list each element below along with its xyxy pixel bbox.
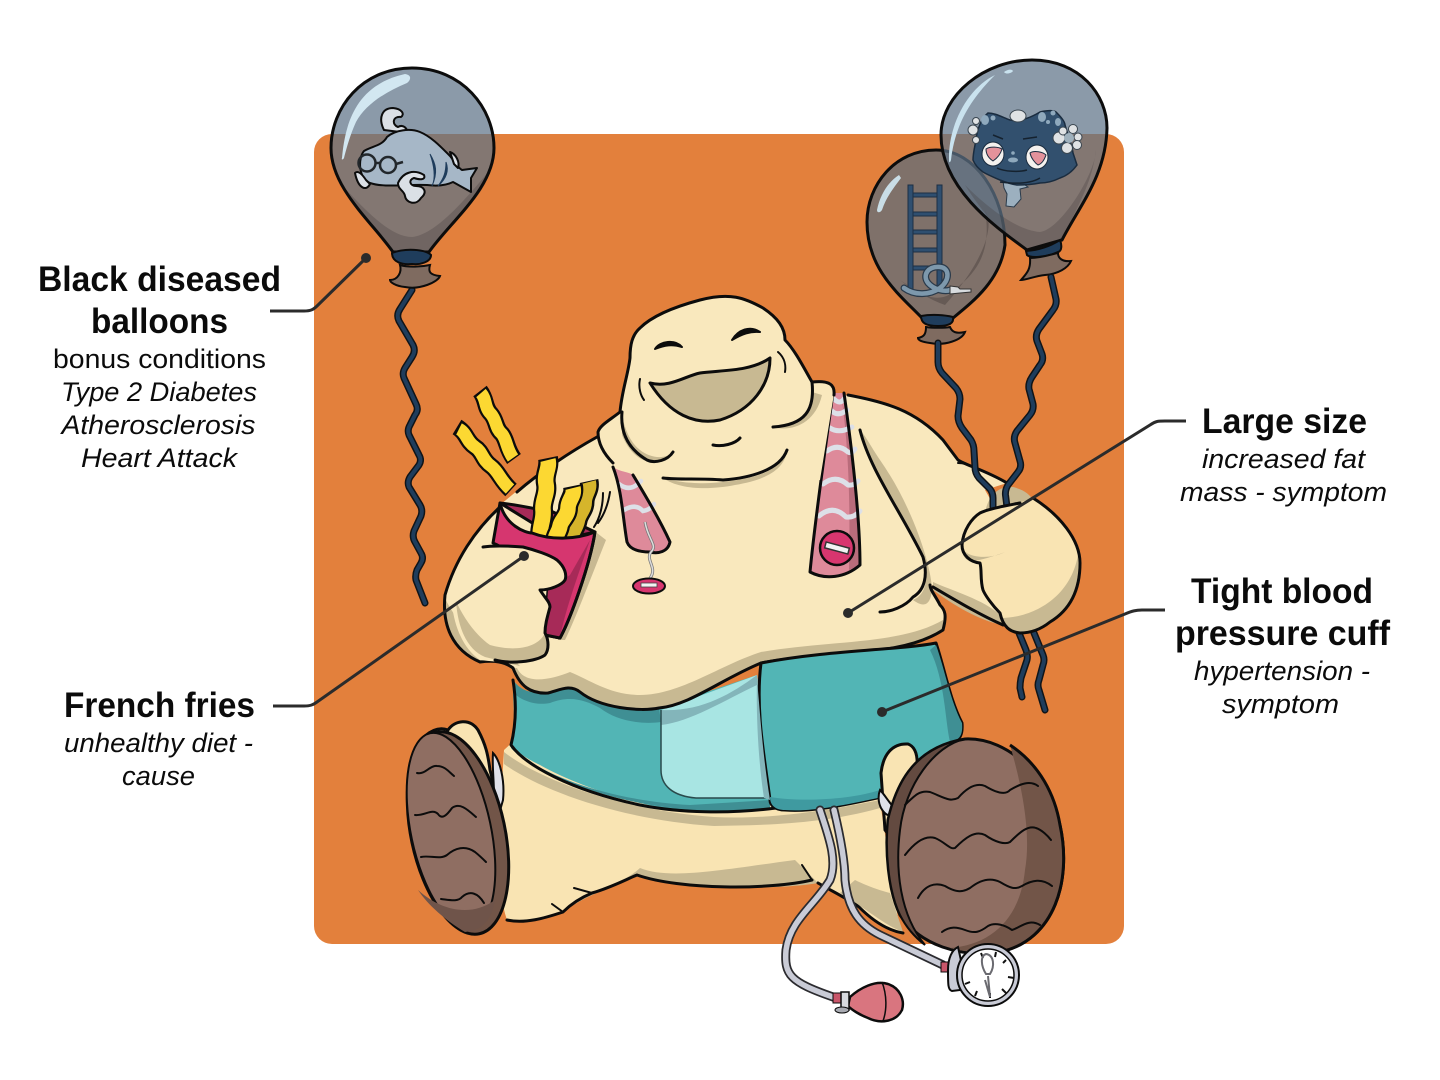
fries in box <box>540 458 589 540</box>
balloon knot <box>392 250 431 264</box>
label: large size: mass - symptom <box>1180 477 1387 507</box>
balloon: ladder and hose <box>867 150 1005 344</box>
label: black diseased balloons: bonus conditions <box>53 344 266 374</box>
label: black diseased balloons <box>38 260 281 473</box>
knot <box>1026 240 1061 257</box>
bulb <box>848 983 903 1021</box>
leader line: large size <box>843 421 1186 618</box>
torso shadows <box>513 430 1033 709</box>
gauge <box>941 944 1019 1006</box>
character: straps with buttons <box>613 393 860 594</box>
character: shorts <box>511 675 776 813</box>
balloon: tired dragon face <box>941 60 1107 280</box>
highlight <box>877 175 901 212</box>
label: tight blood pressure cuff: symptom <box>1222 689 1339 719</box>
shorts light panel <box>661 675 770 798</box>
balloon highlight <box>342 74 410 160</box>
label: black diseased balloons: Atherosclerosis <box>59 410 255 440</box>
label: tight blood pressure cuff: pressure cuff <box>1175 614 1390 653</box>
character: left hand <box>452 545 566 662</box>
toes <box>425 722 495 790</box>
label: large size: increased fat <box>1202 444 1367 474</box>
mouth <box>650 358 770 421</box>
character: head <box>598 296 834 488</box>
dragon spots <box>981 110 1061 162</box>
balloon: sea creature with glasses <box>331 68 494 288</box>
loose fries <box>457 391 514 490</box>
label: large size <box>1180 402 1387 507</box>
character: left shoe <box>391 722 525 944</box>
knot <box>921 315 953 326</box>
label: black diseased balloons: Heart Attack <box>81 443 239 473</box>
label: french fries <box>64 686 255 791</box>
head outline <box>598 296 834 463</box>
label: black diseased balloons: Black diseased <box>38 260 281 299</box>
ankle band <box>879 790 896 815</box>
dragon tongue <box>1003 181 1028 207</box>
dragon flowers <box>968 110 1082 154</box>
character: right hand <box>933 498 1080 633</box>
dragon head <box>973 111 1077 185</box>
label: french fries: French fries <box>64 686 255 725</box>
label: french fries: cause <box>122 761 195 791</box>
french fries box <box>493 458 595 638</box>
eyes <box>655 342 682 349</box>
tubes <box>786 810 943 997</box>
label: tight blood pressure cuff: hypertension - <box>1194 656 1370 686</box>
left strap <box>613 467 670 594</box>
label: tight blood pressure cuff <box>1175 572 1390 719</box>
glasses <box>358 154 403 173</box>
leader line: french fries <box>273 551 529 706</box>
ankle <box>881 744 917 850</box>
label: black diseased balloons: Type 2 Diabetes <box>61 377 257 407</box>
label: black diseased balloons: balloons <box>91 302 228 341</box>
orange background panel <box>314 134 1124 944</box>
dangling thread and small button <box>645 522 653 578</box>
highlight <box>949 70 1013 162</box>
right strap button <box>820 531 854 565</box>
right strap <box>810 393 860 577</box>
ankle band <box>493 753 503 814</box>
balloon strings crossing the arm <box>938 277 1056 507</box>
ladder <box>908 185 942 292</box>
leader line: black diseased balloons <box>270 253 371 311</box>
label: tight blood pressure cuff: Tight blood <box>1191 572 1373 611</box>
character: legs <box>497 720 903 933</box>
blood pressure cuff <box>757 643 962 810</box>
balloon strings (left and below hand) <box>398 290 1045 710</box>
hose <box>904 267 950 294</box>
sphygmomanometer: tubes, bulb and gauge <box>786 810 1019 1021</box>
character: torso and left arm <box>444 395 1033 709</box>
label: french fries: unhealthy diet - <box>64 728 253 758</box>
label: large size: Large size <box>1202 402 1367 441</box>
dragon eyes <box>982 142 1048 169</box>
character: right shoe and ankle <box>879 739 1064 953</box>
creature <box>355 108 477 203</box>
leader line: tight blood pressure cuff <box>877 610 1165 717</box>
